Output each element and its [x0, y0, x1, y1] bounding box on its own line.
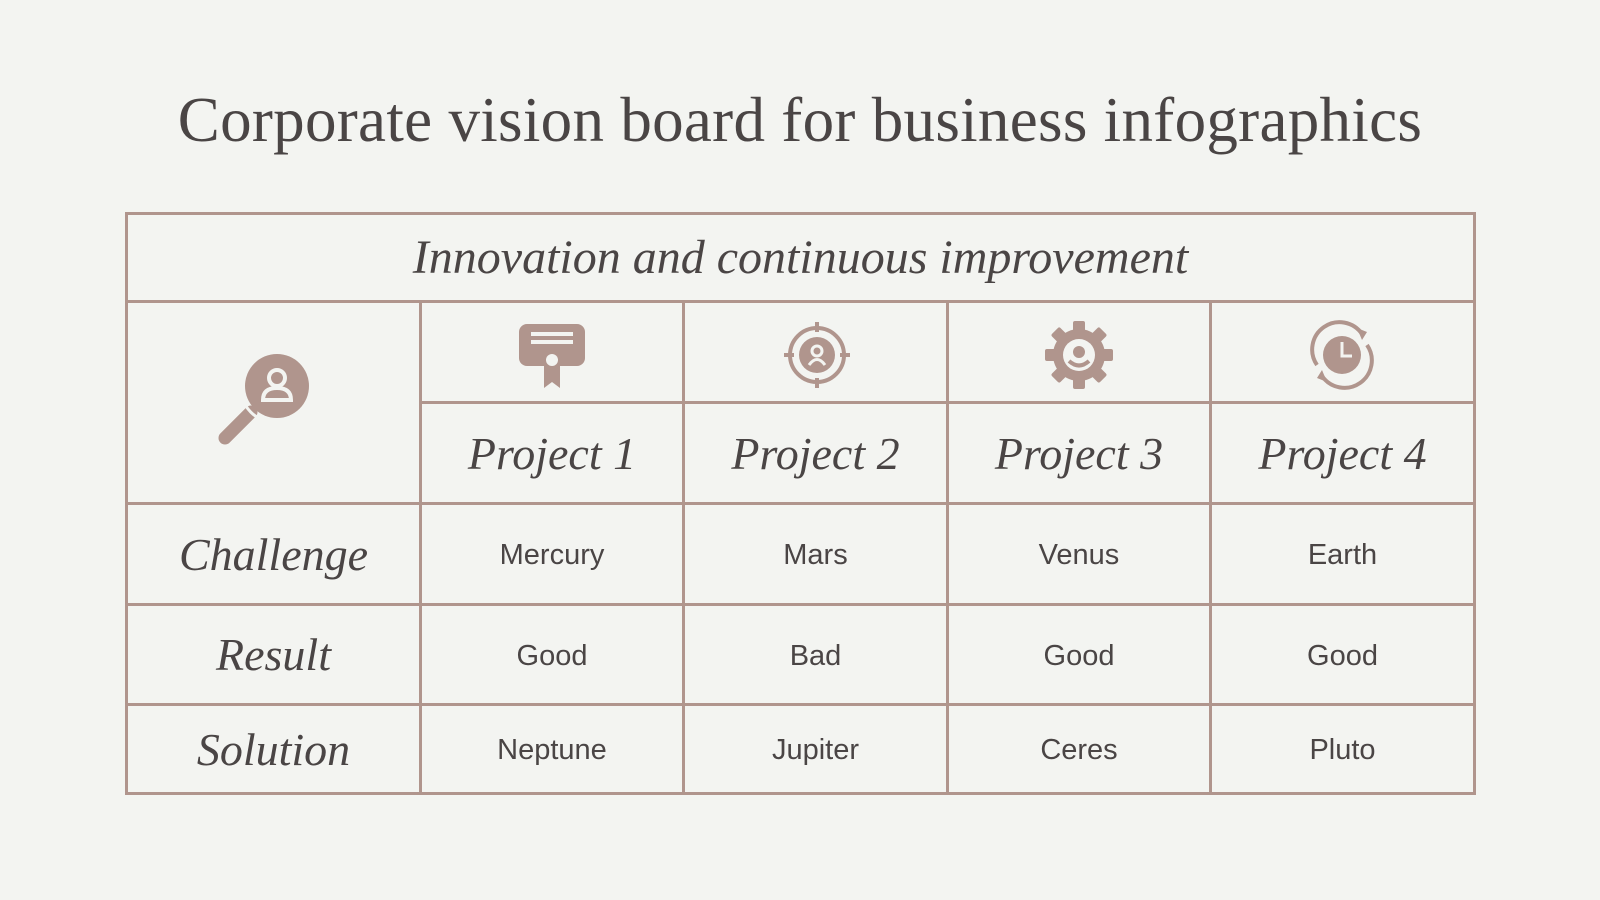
table: Good: [1307, 640, 1378, 672]
icon: gear person: [1045, 321, 1113, 389]
table: Jupiter: [772, 734, 859, 766]
icon: target person: [784, 322, 850, 388]
table: Project 3: [995, 428, 1163, 478]
table: Ceres: [1040, 734, 1118, 766]
table: Project 2: [731, 428, 900, 478]
table: Earth: [1308, 539, 1377, 571]
table: Good: [1044, 640, 1114, 672]
challenge row: Mercury: [500, 539, 604, 571]
table: Mars: [783, 539, 848, 571]
table: Result: [216, 629, 331, 680]
table: Project 4: [1258, 428, 1427, 478]
icon: clock cycle: [1310, 320, 1374, 390]
table: Venus: [1039, 539, 1119, 571]
title: Corporate vision board for business infographics: [178, 85, 1422, 155]
solution row: Neptune: [497, 734, 607, 766]
project labels: Project 1: [468, 428, 636, 478]
icon: magnifier with person: [218, 354, 309, 444]
result row: Good: [517, 640, 587, 672]
table: Pluto: [1309, 734, 1376, 766]
table: Bad: [790, 640, 841, 672]
icon: certificate: [519, 324, 585, 388]
table header: Innovation and continuous improvement: [413, 230, 1188, 284]
table: Solution: [197, 724, 350, 774]
row labels: Challenge: [179, 528, 368, 580]
